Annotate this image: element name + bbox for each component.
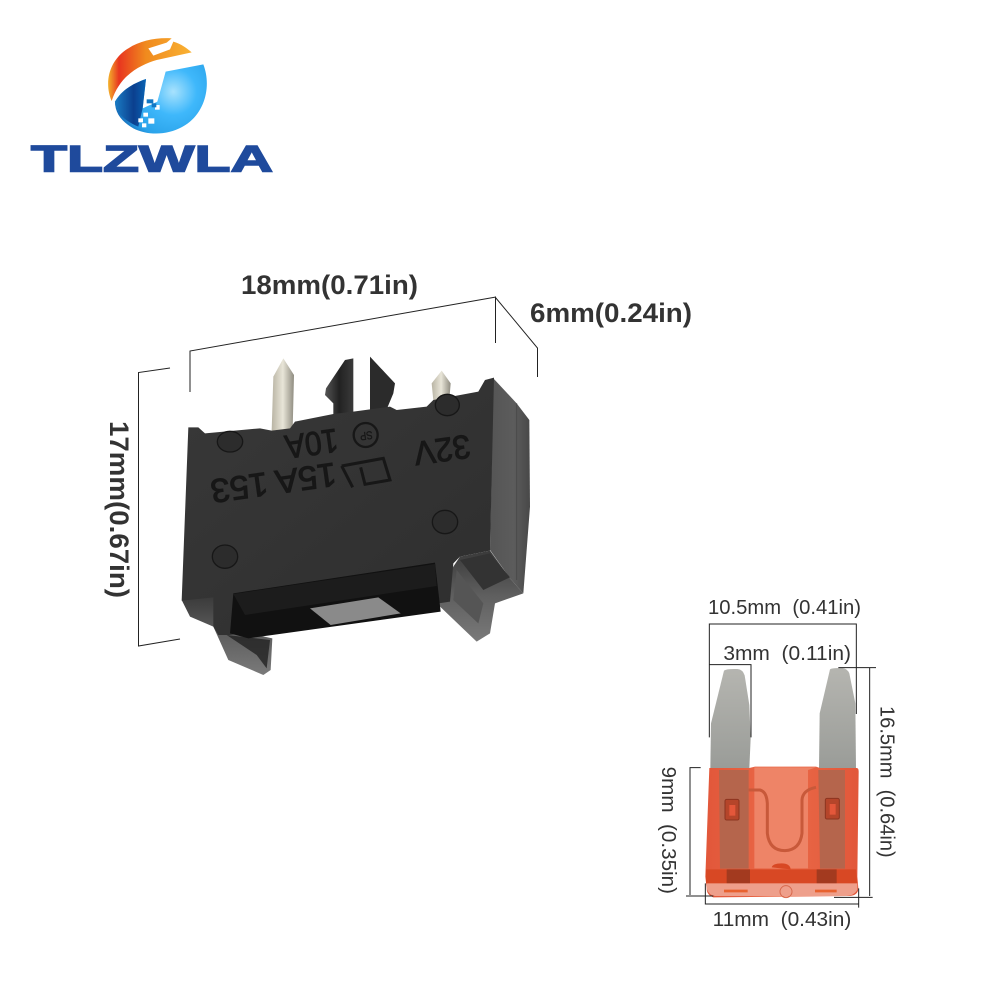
moulded markings: 15A 153 bbox=[208, 455, 339, 509]
moulded markings: SP bbox=[359, 428, 373, 442]
slot bbox=[230, 563, 441, 638]
dimension: 6mm depth bbox=[496, 298, 692, 377]
right leg bbox=[437, 551, 523, 642]
icon: right blade bbox=[819, 668, 856, 768]
body window bbox=[754, 767, 816, 868]
moulded markings: 32V bbox=[411, 427, 473, 471]
brand name: TLZWLA bbox=[31, 138, 273, 180]
icon: right metal pin bbox=[432, 371, 451, 401]
icon: blade windows bbox=[725, 798, 839, 820]
icon: orange and blue globe bbox=[108, 38, 207, 134]
dimension labels: 11mm (0.43in) bbox=[713, 909, 851, 931]
dimension labels: 9mm (0.35in) bbox=[657, 767, 679, 894]
left leg bbox=[182, 597, 272, 675]
black fuse photo bbox=[182, 357, 530, 675]
dimension labels: 16.5mm (0.64in) bbox=[876, 706, 898, 858]
fuse body bbox=[705, 767, 859, 897]
dimension: 6mm depth: 6mm(0.24in) bbox=[530, 298, 692, 328]
icon: moulded bumps bbox=[212, 394, 459, 568]
front face bbox=[182, 378, 494, 635]
dimension labels: 3mm (0.11in) bbox=[723, 643, 851, 665]
bottom band bbox=[706, 869, 857, 883]
dimension: 17mm height: 17mm(0.67in) bbox=[104, 421, 134, 598]
red mini blade fuse bbox=[657, 597, 898, 931]
side face bbox=[490, 378, 530, 593]
icon: left blade bbox=[710, 669, 751, 768]
moulded markings: 10A bbox=[282, 421, 340, 465]
blade shadows bbox=[719, 770, 749, 869]
dimension labels bbox=[657, 597, 898, 931]
dimension: 18mm width: 18mm(0.71in) bbox=[241, 270, 418, 300]
dimension lines bbox=[686, 624, 876, 908]
icon: left metal pin bbox=[272, 358, 294, 431]
U-shaped element bbox=[749, 787, 816, 851]
dimension labels: 10.5mm (0.41in) bbox=[708, 597, 861, 619]
moulded markings bbox=[208, 421, 473, 509]
logo: TLZWLA brand mark bbox=[31, 38, 273, 179]
dimension: 18mm width bbox=[190, 270, 496, 392]
dimension: 17mm height bbox=[104, 368, 180, 646]
icon: centre black tabs bbox=[325, 357, 395, 415]
